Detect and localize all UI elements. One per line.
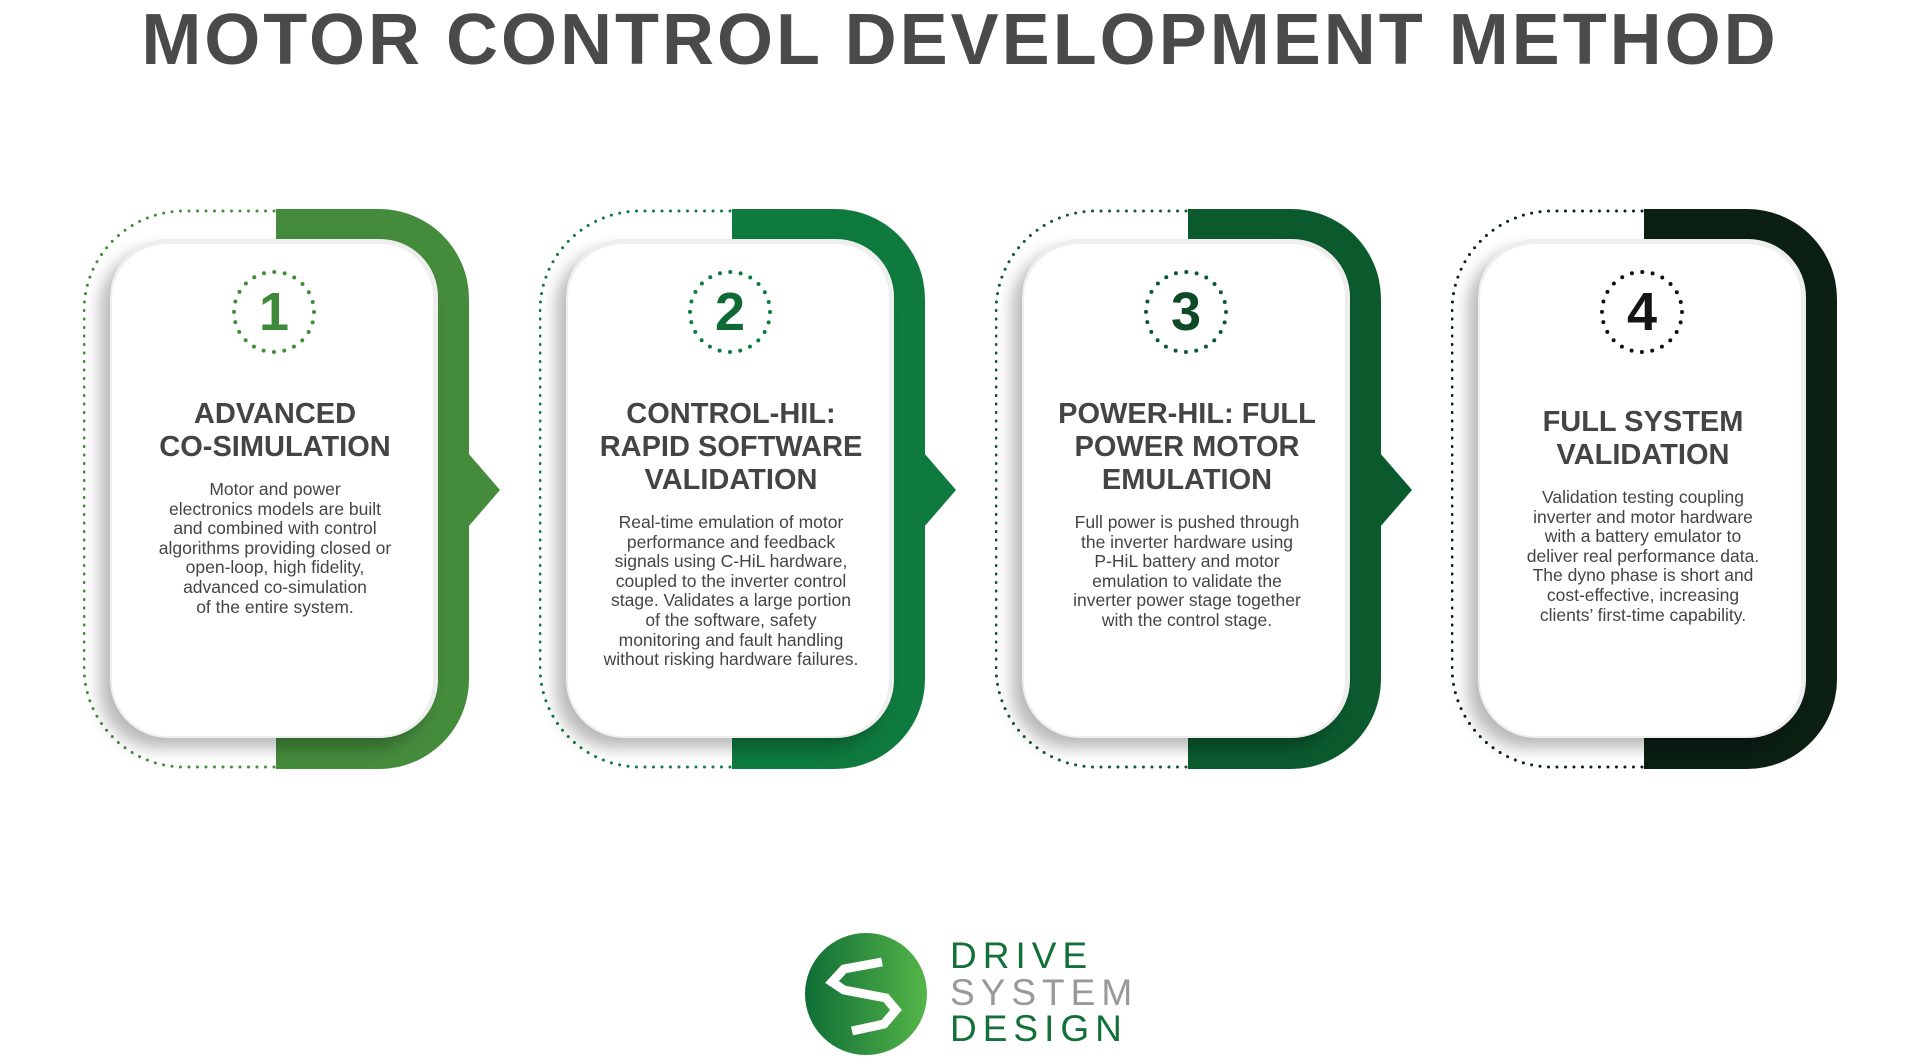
heading 4: FULL SYSTEM <box>1543 406 1743 438</box>
text 4: clients’ first-time capability. <box>1540 605 1746 625</box>
heading 2: VALIDATION <box>645 464 817 496</box>
heading 1 <box>159 398 391 463</box>
panel: step 4 <box>1451 209 1837 769</box>
text 1: and combined with control <box>173 518 377 538</box>
title: MOTOR CONTROL DEVELOPMENT METHOD <box>141 0 1779 80</box>
text 1: open-loop, high fidelity, <box>186 557 364 577</box>
text 3: P-HiL battery and motor <box>1094 551 1280 571</box>
text 3: with the control stage. <box>1102 610 1272 630</box>
text 1: electronics models are built <box>169 499 381 519</box>
text 4: deliver real performance data. <box>1527 546 1759 566</box>
heading 4 <box>1543 406 1743 471</box>
icon: dotted circle 2 <box>688 270 772 354</box>
heading 3 <box>1058 398 1316 496</box>
number 4: 4 <box>1627 282 1657 342</box>
text 4: Validation testing coupling <box>1542 487 1744 507</box>
text 2: performance and feedback <box>627 532 835 552</box>
heading 3: POWER-HIL: FULL <box>1058 398 1316 430</box>
number 2: 2 <box>715 282 745 342</box>
text 1: Motor and power <box>209 479 341 499</box>
heading 2: CONTROL-HIL: <box>626 398 836 430</box>
text 3 <box>1073 512 1301 630</box>
heading 4: VALIDATION <box>1557 439 1729 471</box>
number 3: 3 <box>1171 282 1201 342</box>
text 4: The dyno phase is short and <box>1533 565 1753 585</box>
text 3: emulation to validate the <box>1092 571 1282 591</box>
text 1: of the entire system. <box>196 597 354 617</box>
logo text: SYSTEM <box>950 972 1138 1012</box>
text 2: Real-time emulation of motor <box>619 512 843 532</box>
heading 3: EMULATION <box>1102 464 1272 496</box>
text 1: advanced co-simulation <box>183 577 367 597</box>
panel: step 1 <box>83 209 500 769</box>
heading 3: POWER MOTOR <box>1074 431 1300 463</box>
logo <box>805 933 1138 1055</box>
text 2: without risking hardware failures. <box>604 649 858 669</box>
text 4: inverter and motor hardware <box>1533 507 1753 527</box>
icon: dotted circle 1 <box>232 270 316 354</box>
number 1: 1 <box>259 282 289 342</box>
icon: logo circle <box>805 933 927 1055</box>
heading 1: CO-SIMULATION <box>159 431 391 463</box>
heading 2: RAPID SOFTWARE <box>600 431 862 463</box>
text 4 <box>1527 487 1759 625</box>
text 2: of the software, safety <box>645 610 817 630</box>
logo text <box>950 935 1138 1049</box>
heading 1: ADVANCED <box>194 398 356 430</box>
text 2: coupled to the inverter control <box>616 571 846 591</box>
logo text: DRIVE <box>950 935 1093 976</box>
panel: step 2 <box>539 209 956 769</box>
text 4: with a battery emulator to <box>1545 526 1741 546</box>
heading 2 <box>600 398 862 496</box>
text 1 <box>159 479 391 617</box>
text 2: stage. Validates a large portion <box>611 590 851 610</box>
text 2: signals using C-HiL hardware, <box>615 551 847 571</box>
text 3: inverter power stage together <box>1073 590 1301 610</box>
panel: step 3 <box>995 209 1412 769</box>
text 4: cost-effective, increasing <box>1547 585 1739 605</box>
text 3: the inverter hardware using <box>1081 532 1293 552</box>
icon: dotted circle 3 <box>1144 270 1228 354</box>
logo text: DESIGN <box>950 1008 1128 1049</box>
text 1: algorithms providing closed or <box>159 538 391 558</box>
icon: dotted circle 4 <box>1600 270 1684 354</box>
text 3: Full power is pushed through <box>1075 512 1299 532</box>
text 2 <box>604 512 858 669</box>
text 2: monitoring and fault handling <box>619 630 843 650</box>
